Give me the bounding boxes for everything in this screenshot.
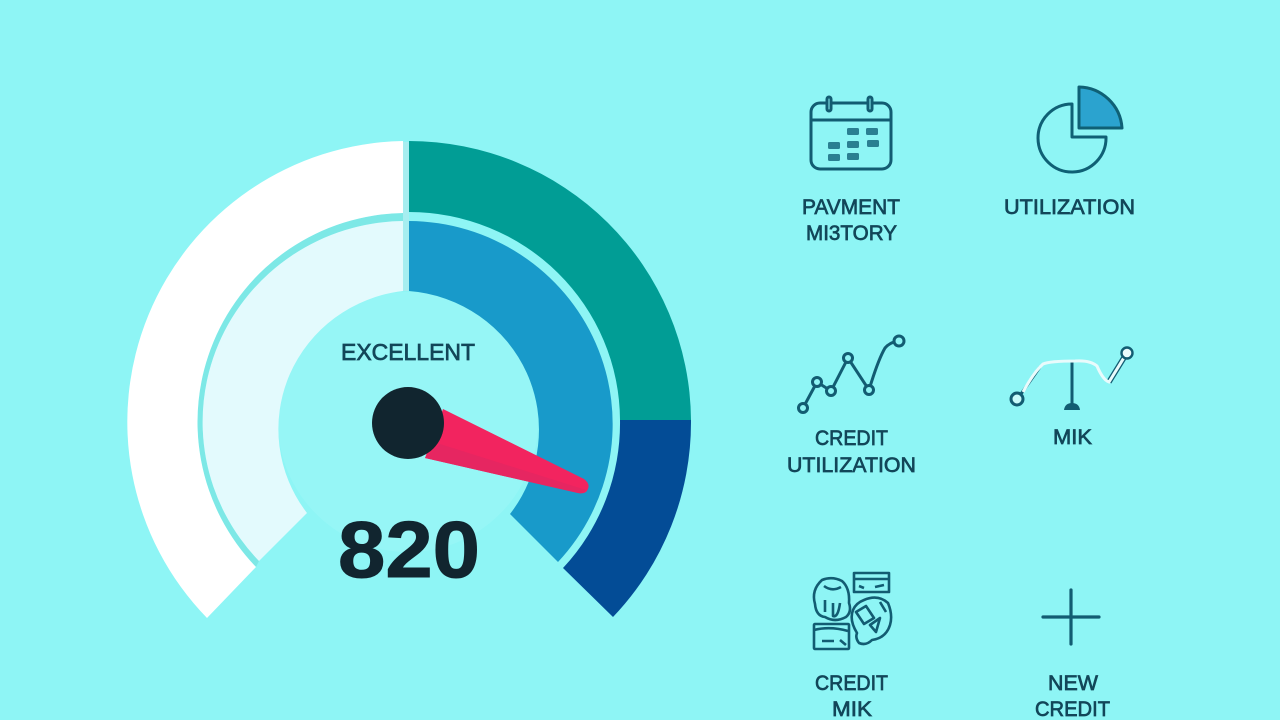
item: utilization: [1004, 87, 1135, 219]
icon: calendar: [811, 97, 891, 169]
item: credit mix: [814, 573, 891, 720]
label: new credit: NEW: [1048, 671, 1099, 695]
item: credit utilization: [787, 336, 916, 477]
item: new credit: [1035, 590, 1110, 720]
gauge: [127, 141, 691, 618]
needle: [425, 409, 589, 493]
gauge segment: outer teal: [409, 141, 691, 420]
gauge rating label: EXCELLENT: [341, 339, 475, 365]
icon: pie chart: [1038, 87, 1122, 172]
label: payment history: PAVMENT: [802, 195, 900, 219]
label: credit utilization: UTILIZATION: [787, 453, 916, 477]
needle shading: [425, 444, 586, 493]
gauge segment: outer white: [127, 141, 403, 618]
label: credit utilization: CREDIT: [815, 426, 888, 450]
item: mix: [1011, 348, 1132, 449]
label: mix: MIK: [1053, 425, 1093, 449]
needle hub: [372, 387, 444, 459]
gauge segment: inner pale: [203, 221, 403, 561]
gauge segment: inner blue: [409, 221, 613, 562]
icon: line chart: [798, 336, 904, 412]
label: payment history: MI3TORY: [806, 221, 897, 245]
gauge divider ring: [197, 213, 403, 567]
label: utilization: UTILIZATION: [1004, 195, 1135, 219]
gauge segment: outer dark blue: [563, 420, 691, 617]
label: credit mix: CREDIT: [815, 671, 888, 695]
gauge centre area: [278, 292, 538, 552]
icon: cards and coins: [814, 573, 891, 649]
icon: plus: [1043, 590, 1099, 644]
score value: 820: [338, 505, 480, 594]
item: payment history: [802, 97, 900, 245]
icon: balance curve: [1011, 348, 1132, 410]
gauge vertical divider: [403, 142, 409, 291]
needle body: [425, 409, 589, 493]
